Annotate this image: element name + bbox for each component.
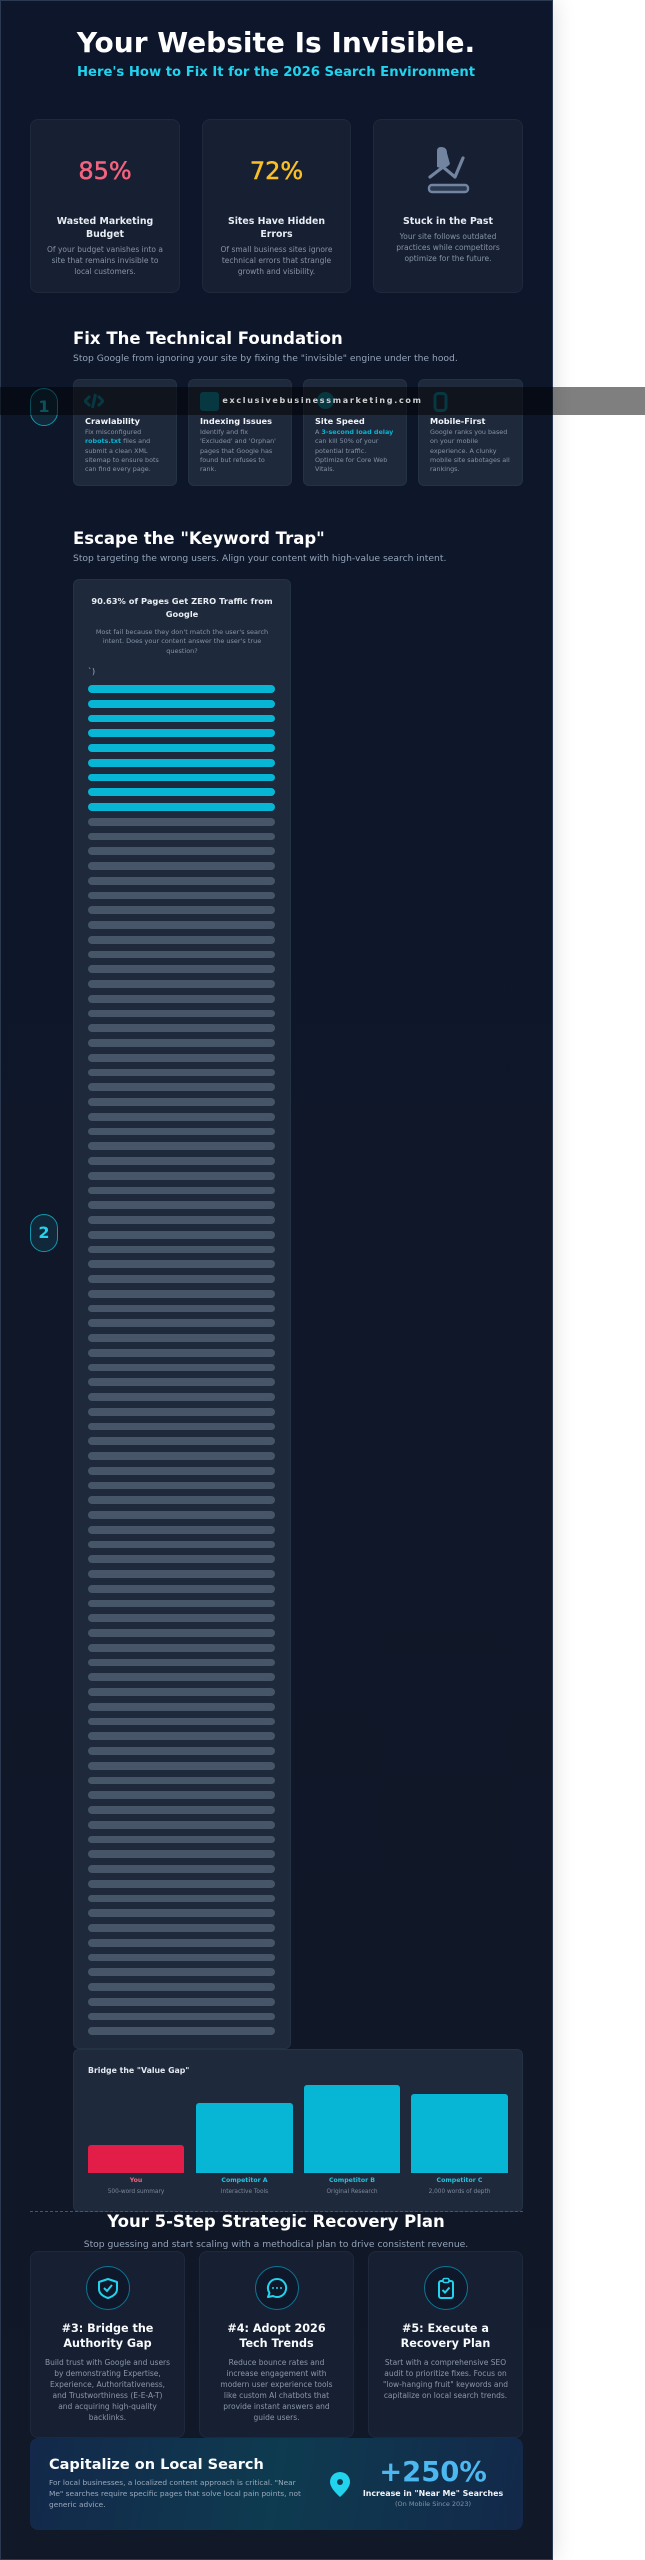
feature text: Optimize for Core Web bbox=[315, 456, 387, 464]
step text: like custom AI chatbots that bbox=[224, 2391, 329, 2400]
feature text: potential traffic. bbox=[315, 446, 366, 454]
card heading: Errors bbox=[260, 229, 293, 240]
feature text bbox=[200, 428, 276, 473]
step heading bbox=[62, 2322, 153, 2350]
step badge 2 bbox=[30, 1214, 58, 1252]
chart heading: Google bbox=[166, 609, 198, 619]
feature text bbox=[315, 428, 394, 473]
callout text bbox=[49, 2478, 301, 2509]
bar: competitor B bbox=[304, 2085, 400, 2173]
panel: local search callout bbox=[30, 2438, 523, 2530]
feature text: mobile site sabotages all bbox=[430, 456, 510, 464]
step text: guide users. bbox=[253, 2413, 300, 2422]
feature heading: Indexing Issues bbox=[200, 416, 272, 426]
stat note: (On Mobile Since 2023) bbox=[395, 2500, 471, 2508]
bar: competitor C bbox=[411, 2094, 508, 2173]
step text: and acquiring high-quality bbox=[58, 2402, 157, 2411]
stray code fragment: `) bbox=[88, 667, 95, 676]
stat: 85%: 85% bbox=[78, 157, 132, 185]
feature text: rankings. bbox=[430, 465, 460, 473]
icon: map pin bbox=[330, 2472, 350, 2497]
card text: technical errors that strangle bbox=[222, 256, 331, 265]
panel: step 4 bbox=[199, 2251, 354, 2438]
icon: speed gauge bbox=[317, 392, 334, 409]
section subtitle: Stop guessing and start scaling with a methodical plan to drive consistent revenue. bbox=[84, 2239, 468, 2250]
chart heading: 90.63% of Pages Get ZERO Traffic from bbox=[91, 596, 273, 606]
card text bbox=[396, 232, 500, 263]
callout text: For local businesses, a localized content approach is critical. "Near bbox=[49, 2478, 296, 2487]
feature text: rank. bbox=[200, 465, 216, 473]
stat: 72%: 72% bbox=[250, 157, 303, 185]
icon: mobile phone bbox=[434, 392, 448, 412]
panel: zero traffic chart bbox=[73, 579, 291, 2049]
waffle bar chart: 9 cyan and 83 grey bars bbox=[88, 685, 275, 2035]
step text: by demonstrating Expertise, bbox=[54, 2369, 161, 2378]
card heading: Wasted Marketing bbox=[57, 216, 153, 227]
panel: step 3 bbox=[30, 2251, 185, 2438]
icon: chat bubble bbox=[255, 2266, 299, 2310]
callout text: Me" searches require specific pages that solve local pain points, not bbox=[49, 2489, 301, 2498]
feature heading: Site Speed bbox=[315, 416, 365, 426]
feature text: experience. A clunky bbox=[430, 446, 497, 454]
title: Your Website Is Invisible. bbox=[77, 26, 475, 59]
callout text: generic advice. bbox=[49, 2500, 106, 2509]
step text: "low-hanging fruit" keywords and bbox=[383, 2380, 508, 2389]
feature text: Fix misconfigured bbox=[85, 428, 141, 436]
feature text: found but refuses to bbox=[200, 456, 265, 464]
step text: provide instant answers and bbox=[223, 2402, 330, 2411]
panel: sites have hidden errors stat bbox=[202, 119, 351, 293]
card text: Of small business sites ignore bbox=[221, 245, 332, 254]
feature text bbox=[430, 428, 510, 473]
card heading bbox=[228, 216, 325, 240]
watermark band bbox=[0, 387, 645, 415]
feature text: pages that Google has bbox=[200, 446, 272, 454]
step heading: #3: Bridge the bbox=[62, 2322, 153, 2335]
step text: and Trustworthiness (E-E-A-T) bbox=[53, 2391, 162, 2400]
feature text: sitemap to ensure bots bbox=[85, 456, 159, 464]
step text: backlinks. bbox=[89, 2413, 126, 2422]
card text bbox=[220, 245, 332, 276]
icon: shield check bbox=[86, 2266, 130, 2310]
step text: Reduce bounce rates and bbox=[229, 2358, 324, 2367]
card heading: Stuck in the Past bbox=[403, 216, 493, 227]
chart heading: Bridge the "Value Gap" bbox=[88, 2066, 189, 2075]
step text bbox=[220, 2358, 333, 2422]
step badge 1 bbox=[30, 388, 58, 426]
icon: code brackets bbox=[84, 394, 104, 408]
step heading: Tech Trends bbox=[239, 2337, 314, 2350]
card heading: Budget bbox=[86, 229, 124, 240]
stat label: Increase in "Near Me" Searches bbox=[363, 2489, 503, 2498]
step badge 1: 1 bbox=[38, 397, 50, 416]
chart heading bbox=[91, 596, 273, 619]
feature text bbox=[85, 428, 159, 473]
panel: site speed bbox=[303, 379, 407, 486]
feature text: Identify and fix bbox=[200, 428, 248, 436]
step text: Experience, Authoritativeness, bbox=[50, 2380, 165, 2389]
callout heading: Capitalize on Local Search bbox=[49, 2457, 264, 2473]
step text: audit to prioritize fixes. Focus on bbox=[384, 2369, 507, 2378]
feature text: Google ranks you based bbox=[430, 428, 507, 436]
step text: capitalize on local search trends. bbox=[384, 2391, 507, 2400]
heading: keyword trap: Escape the "Keyword Trap" bbox=[73, 529, 325, 548]
feature text: robots.txt files and bbox=[85, 437, 150, 445]
step badge 2: 2 bbox=[38, 1223, 50, 1242]
caption: you: 500-word summary bbox=[108, 2189, 164, 2195]
step text: Start with a comprehensive SEO bbox=[385, 2358, 506, 2367]
panel: step 5 bbox=[368, 2251, 523, 2438]
heading: technical foundation: Fix The Technical Foundation bbox=[73, 329, 343, 348]
step heading: #5: Execute a bbox=[402, 2322, 489, 2335]
heading: recovery plan: Your 5-Step Strategic Recovery Plan bbox=[107, 2212, 445, 2231]
card text: growth and visibility. bbox=[238, 267, 315, 276]
chart text: Most fail because they don't match the user's search bbox=[96, 628, 268, 636]
feature heading: Mobile-First bbox=[430, 416, 485, 426]
feature text: submit a clean XML bbox=[85, 446, 148, 454]
subtitle: Here's How to Fix It for the 2026 Search Environment bbox=[77, 65, 475, 80]
card text: site that remains invisible to bbox=[52, 256, 158, 265]
card text bbox=[47, 245, 163, 276]
panel: crawlability bbox=[73, 379, 177, 486]
bar: you bbox=[88, 2145, 184, 2173]
step heading: Recovery Plan bbox=[401, 2337, 490, 2350]
card text: Your site follows outdated bbox=[400, 232, 496, 241]
feature text: on your mobile bbox=[430, 437, 478, 445]
panel: indexing issues bbox=[188, 379, 292, 486]
step text: modern user experience tools bbox=[220, 2380, 333, 2389]
icon: outdated chart on a base bbox=[428, 147, 470, 194]
watermark band: exclusivebusinessmarketing.com bbox=[222, 396, 423, 405]
chart text: question? bbox=[166, 646, 198, 654]
feature text: Vitals. bbox=[315, 465, 335, 473]
step heading bbox=[227, 2322, 326, 2350]
card text: optimize for the future. bbox=[404, 254, 492, 263]
label: competitor B: Competitor B bbox=[329, 2177, 375, 2184]
label: competitor C: Competitor C bbox=[437, 2177, 482, 2184]
caption: competitor C: 2,000 words of depth bbox=[429, 2189, 490, 2195]
section subtitle: Stop targeting the wrong users. Align your content with high-value search intent. bbox=[73, 553, 446, 564]
feature heading: Crawlability bbox=[85, 416, 140, 426]
panel: value gap chart bbox=[73, 2049, 523, 2212]
card heading: Sites Have Hidden bbox=[228, 216, 325, 227]
step text: Build trust with Google and users bbox=[45, 2358, 170, 2367]
card text: Of your budget vanishes into a bbox=[47, 245, 163, 254]
feature text: can kill 50% of your bbox=[315, 437, 378, 445]
bar: competitor A bbox=[196, 2103, 293, 2173]
step text: increase engagement with bbox=[226, 2369, 326, 2378]
chart text: intent. Does your content answer the user's true bbox=[103, 637, 261, 645]
stat: +250%: +250% bbox=[379, 2457, 487, 2488]
label: competitor A: Competitor A bbox=[221, 2177, 268, 2184]
card heading bbox=[57, 216, 153, 240]
step heading bbox=[401, 2322, 490, 2350]
chart text bbox=[96, 628, 268, 654]
panel: wasted marketing budget stat bbox=[30, 119, 180, 293]
panel: mobile-first bbox=[418, 379, 523, 486]
card text: local customers. bbox=[74, 267, 136, 276]
icon: index grid bbox=[200, 392, 219, 411]
caption: competitor A: Interactive Tools bbox=[221, 2189, 268, 2195]
icon: clipboard check bbox=[424, 2266, 468, 2310]
step heading: Authority Gap bbox=[63, 2337, 152, 2350]
card text: practices while competitors bbox=[396, 243, 500, 252]
step heading: #4: Adopt 2026 bbox=[227, 2322, 326, 2335]
caption: competitor B: Original Research bbox=[326, 2189, 378, 2195]
panel: stuck in the past bbox=[373, 119, 523, 293]
feature text: 'Excluded' and 'Orphan' bbox=[200, 437, 276, 445]
feature text: can find every page. bbox=[85, 465, 151, 473]
feature text: A 3-second load delay bbox=[315, 428, 393, 436]
step text bbox=[45, 2358, 170, 2422]
label: you: You bbox=[130, 2177, 142, 2184]
step text bbox=[383, 2358, 508, 2400]
section subtitle: Stop Google from ignoring your site by fixing the "invisible" engine under the hood. bbox=[73, 353, 458, 364]
